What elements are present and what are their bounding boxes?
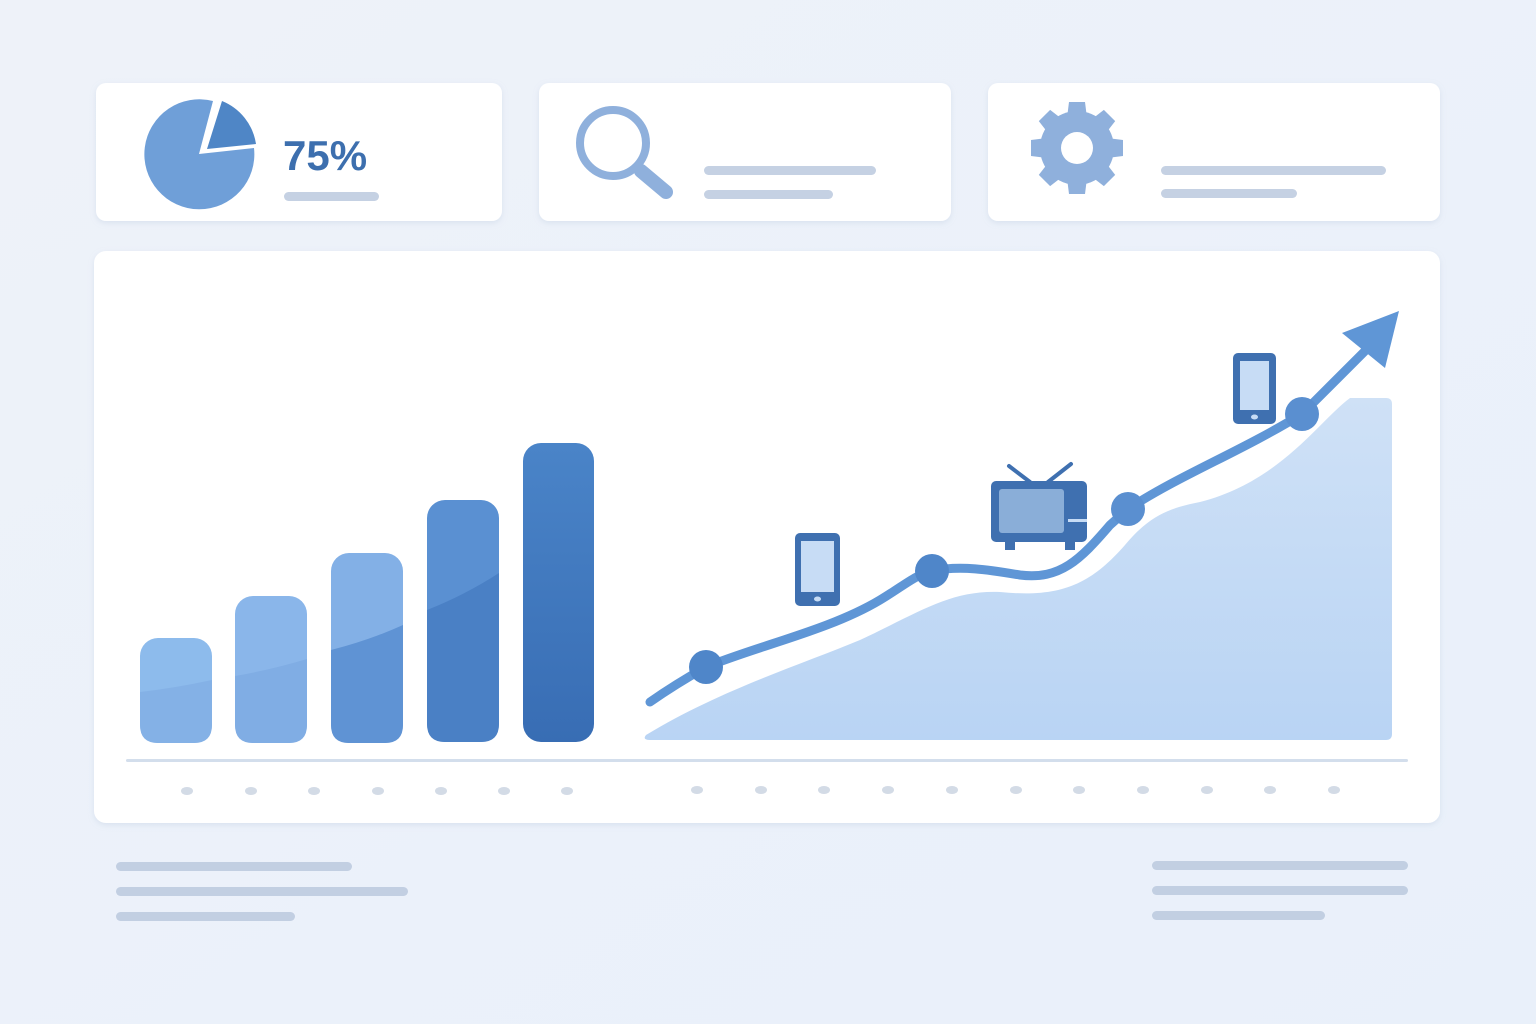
icon: tv bbox=[991, 464, 1087, 550]
icon: pie chart bbox=[144, 99, 256, 209]
text line bbox=[284, 192, 379, 201]
bar chart bbox=[140, 443, 594, 743]
panel: main chart bbox=[94, 251, 1440, 823]
text lines bbox=[704, 166, 876, 199]
text lines bbox=[1161, 166, 1386, 198]
icon: phone bbox=[1233, 353, 1276, 424]
card: search bbox=[539, 83, 951, 221]
icon: gear bbox=[1031, 102, 1123, 194]
card: settings bbox=[988, 83, 1440, 221]
area chart bbox=[645, 398, 1392, 740]
card: pie stat bbox=[96, 83, 502, 221]
text block: bottom left bbox=[116, 862, 408, 921]
stat: 75%: 75% bbox=[283, 132, 367, 179]
icon: phone bbox=[795, 533, 840, 606]
text block: bottom right bbox=[1152, 861, 1408, 920]
icon: magnifier bbox=[580, 110, 666, 192]
trend line with arrow bbox=[650, 311, 1399, 702]
x axis bbox=[126, 759, 1408, 795]
